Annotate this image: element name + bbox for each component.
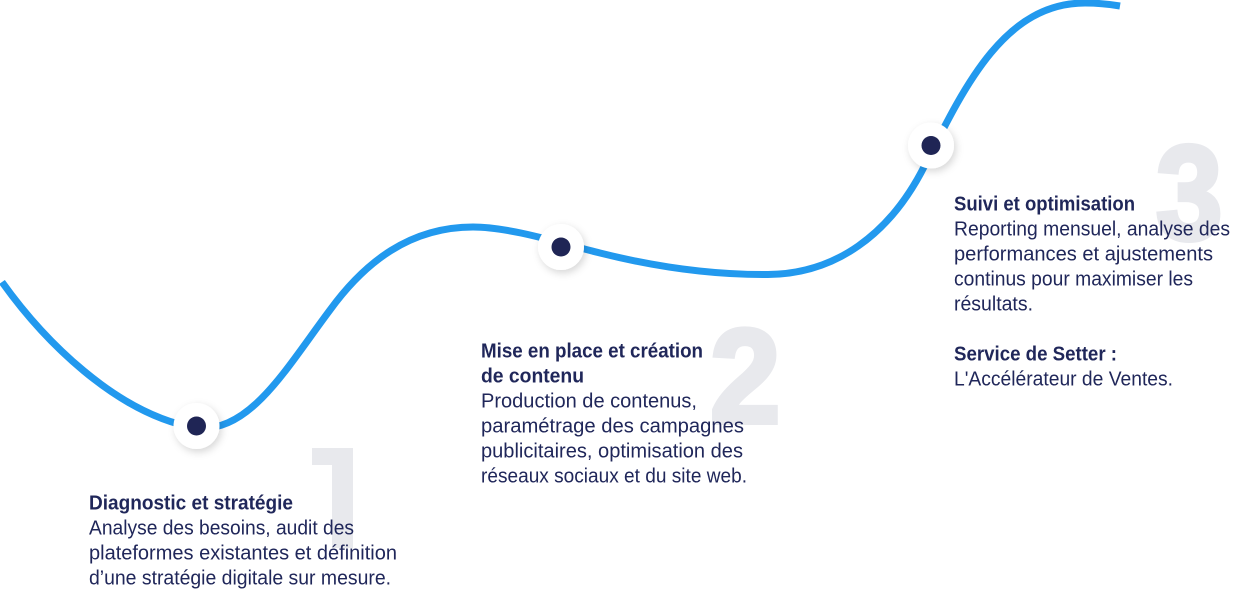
step 3 text: Service de Setter : [954,344,1117,366]
step 1 text: plateformes existantes et définition [89,542,397,564]
step 1 text [89,492,397,590]
marker 2 [538,224,584,270]
number 3: 3 [1156,119,1222,268]
step 2 text [481,340,747,488]
marker 1 [174,403,220,449]
step 2 text: Mise en place et création [481,340,703,362]
step 1 text: Analyse des besoins, audit des [89,518,354,540]
step 3 text: performances et ajustements [954,244,1213,266]
step 3 text: résultats. [954,294,1033,316]
step 2 text: publicitaires, optimisation des [481,440,743,462]
step 3 text: Reporting mensuel, analyse des [954,218,1230,240]
step 1 text: Diagnostic et stratégie [89,492,293,514]
step 2 text: de contenu [481,366,584,388]
curve line [2,3,1120,428]
step 3 text: continus pour maximiser les [954,268,1193,290]
step 1 text: d’une stratégie digitale sur mesure. [89,568,391,590]
step 2 text: réseaux sociaux et du site web. [481,466,747,488]
number 2: 2 [710,302,780,452]
step 3 text: Suivi et optimisation [954,194,1135,216]
marker 3 [908,122,954,168]
step 2 text: Production de contenus, [481,390,697,412]
step 3 text [954,194,1230,390]
step 3 text: L'Accélérateur de Ventes. [954,368,1173,390]
step 2 text: paramétrage des campagnes [481,416,744,438]
